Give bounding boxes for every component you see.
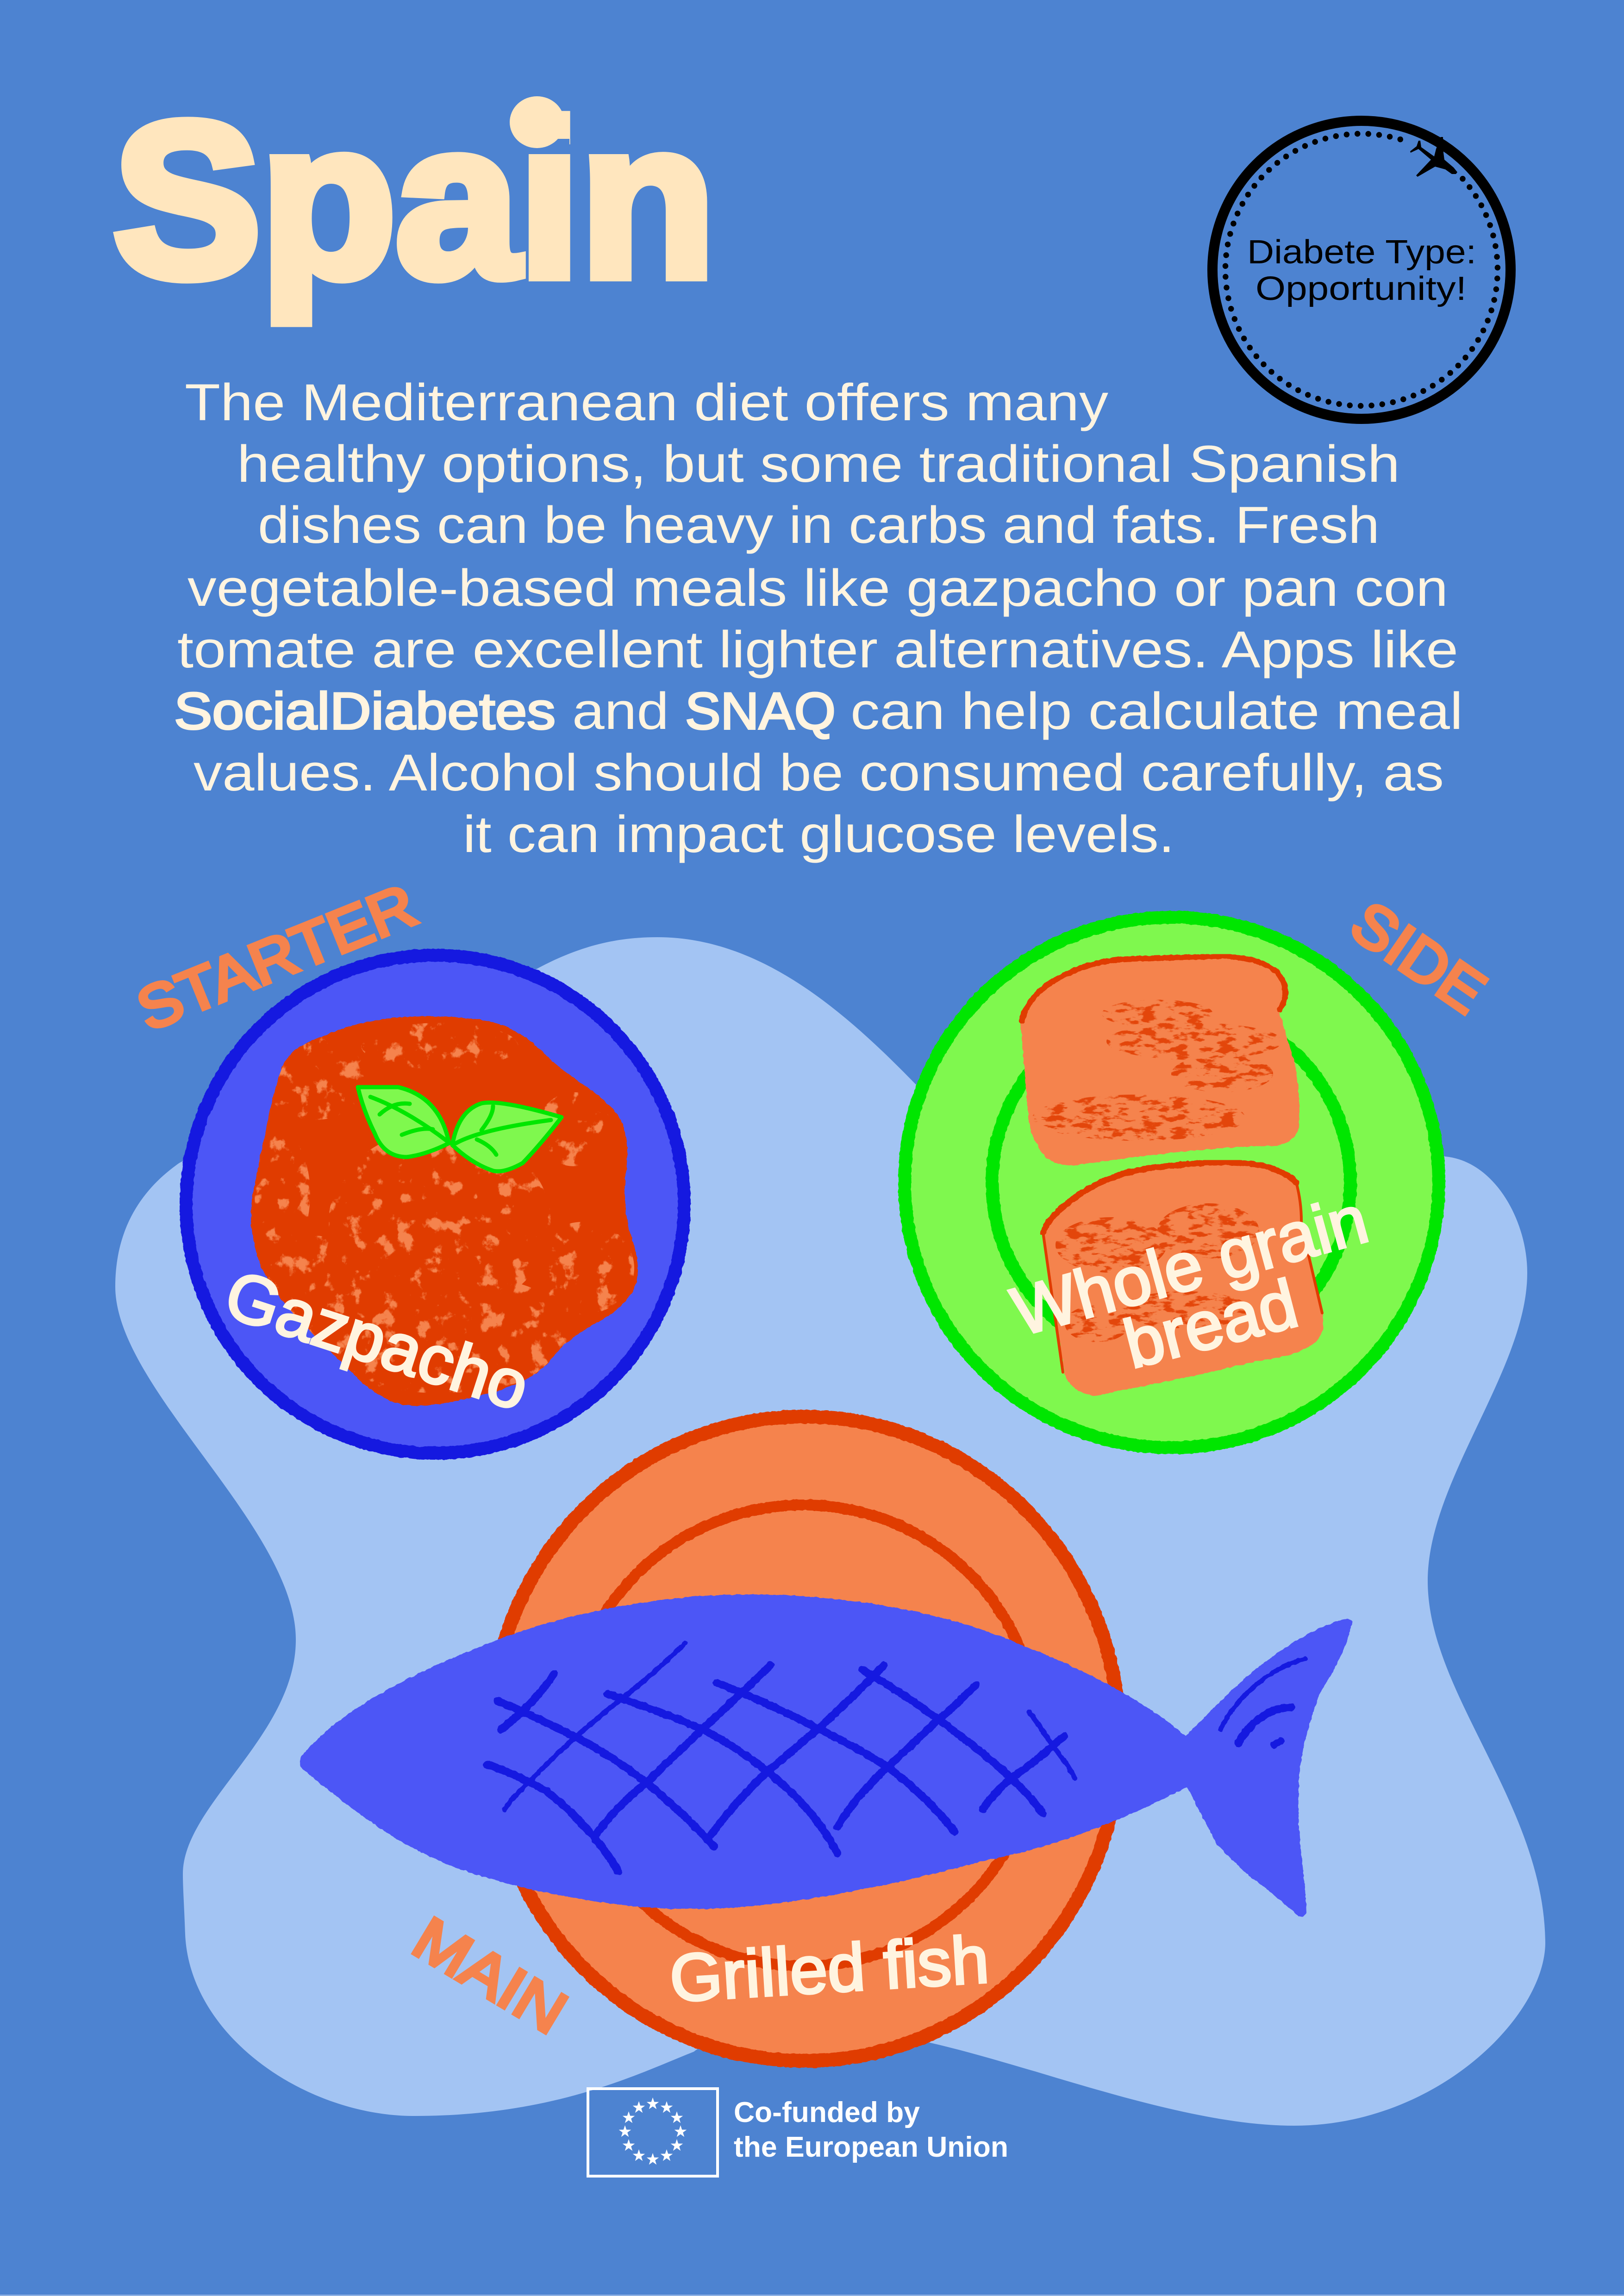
- intro paragraph: and: [572, 682, 669, 740]
- footer: EU co-funding: [588, 2089, 1008, 2176]
- icon: airplane: [1410, 137, 1457, 177]
- title: Spain: [113, 77, 715, 324]
- light blue blob: [115, 937, 1545, 2126]
- plate: [490, 1417, 1119, 2061]
- intro paragraph: healthy options, but some traditional Spanish: [237, 435, 1400, 493]
- intro paragraph: SNAQ: [685, 682, 836, 740]
- icon: EU flag: [588, 2089, 718, 2176]
- intro paragraph: SocialDiabetes: [174, 682, 556, 740]
- fish grill marks: [487, 1643, 1305, 1871]
- gazpacho: [241, 1004, 648, 1416]
- intro paragraph: vegetable-based meals like gazpacho or pan con: [187, 559, 1448, 617]
- icon: basil leaves: [358, 1087, 562, 1171]
- panel: starter plate: [186, 955, 684, 1453]
- label: side: SIDE: [1339, 888, 1498, 1026]
- intro paragraph: can help calculate meal: [850, 682, 1463, 740]
- funding text: the European Union: [734, 2131, 1008, 2163]
- panel: main plate: [300, 1417, 1352, 2061]
- intro paragraph: it can impact glucose levels.: [463, 805, 1174, 863]
- plate label: gazpacho: Gazpacho: [216, 1256, 538, 1425]
- intro paragraph: tomate are excellent lighter alternatives. Apps like: [177, 621, 1458, 678]
- badge text: Diabete Type:: [1247, 234, 1476, 271]
- intro paragraph: The Mediterranean diet offers many: [185, 373, 1108, 431]
- plate label: whole grain bread: bread: [1117, 1265, 1305, 1383]
- plate: [905, 917, 1439, 1448]
- bread slice: bottom: [1037, 1161, 1329, 1398]
- plate: [186, 955, 684, 1453]
- icon: fish: [300, 1594, 1352, 1916]
- badge text: [1247, 234, 1476, 307]
- funding text: Co-funded by: [734, 2097, 920, 2128]
- label: main: MAIN: [402, 1904, 578, 2047]
- intro paragraph: values. Alcohol should be consumed carefully, as: [194, 744, 1444, 802]
- badge text: Opportunity!: [1255, 270, 1467, 307]
- intro paragraph: [174, 373, 1463, 863]
- intro paragraph: dishes can be heavy in carbs and fats. Fresh: [258, 496, 1380, 554]
- plate label: whole grain bread: Whole grain: [1004, 1181, 1376, 1350]
- label: starter: STARTER: [128, 871, 425, 1044]
- bread slice: top: [1018, 955, 1305, 1166]
- badge: diabetes type: [1212, 121, 1511, 419]
- plate label: grilled fish: Grilled fish: [668, 1922, 991, 2016]
- panel: side plate: [905, 917, 1439, 1448]
- funding text: [734, 2097, 1008, 2163]
